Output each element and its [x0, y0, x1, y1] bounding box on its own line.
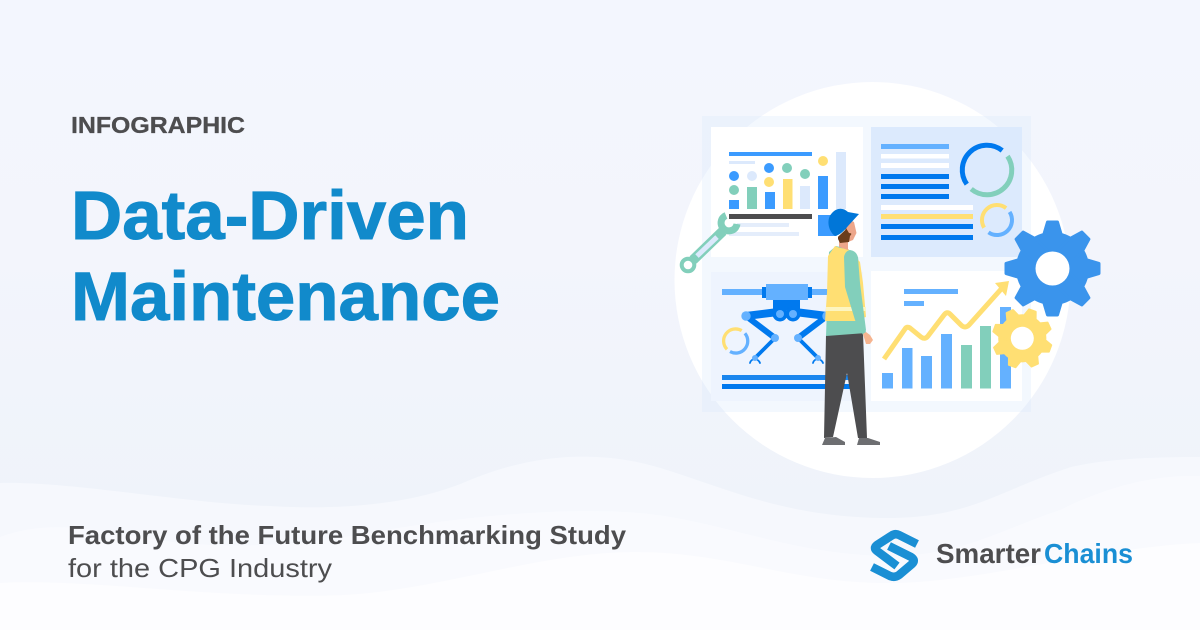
label: infographic: INFOGRAPHIC	[71, 112, 245, 138]
wordmark	[936, 538, 1133, 569]
safety vest	[825, 246, 866, 321]
subtitle: Factory of the Future Benchmarking Study	[68, 520, 627, 550]
hand	[863, 332, 873, 344]
panel: growth chart	[871, 271, 1022, 401]
icon: blue gear	[1006, 222, 1099, 315]
logo: SmarterChains	[872, 534, 1133, 577]
worker figure	[822, 209, 880, 445]
title: Maintenance	[71, 258, 500, 335]
trousers	[824, 333, 867, 438]
illustration: circle backdrop	[674, 82, 1070, 478]
subtitle	[68, 520, 627, 583]
dashboard backing	[702, 116, 1031, 412]
reflective strip	[826, 307, 866, 311]
panel: donut charts and lines	[871, 127, 1022, 257]
shoes	[822, 437, 880, 445]
illustration: dashboard with worker	[682, 116, 1099, 445]
shirt	[826, 246, 866, 336]
sleeve	[844, 250, 866, 335]
wordmark: Chains	[1044, 538, 1133, 569]
head	[828, 209, 859, 250]
panel: robot arm	[711, 272, 863, 401]
icon: S mark	[872, 534, 917, 577]
wordmark: Smarter	[936, 538, 1041, 569]
panel: bar chart with dots	[711, 127, 863, 257]
title: Data-Driven	[71, 177, 469, 254]
bottom waves	[0, 457, 1200, 630]
icon: yellow gear	[984, 300, 1060, 376]
title	[71, 177, 500, 335]
icon: wrench	[682, 216, 737, 271]
subtitle: for the CPG Industry	[68, 553, 332, 583]
